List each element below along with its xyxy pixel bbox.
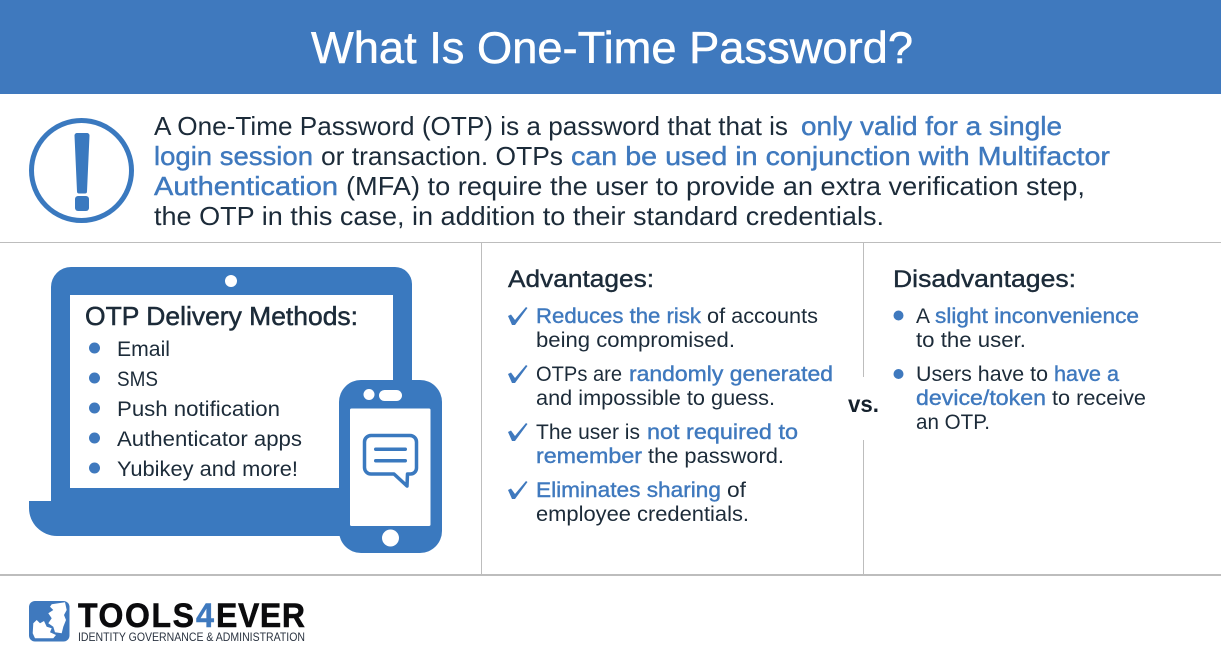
intro paragraph xyxy=(154,111,1110,231)
advantage 2 xyxy=(508,362,833,410)
disadvantage 2: device/token xyxy=(916,386,1046,410)
advantage 3 xyxy=(508,420,798,468)
title banner xyxy=(0,0,1221,94)
intro paragraph: or transaction. OTPs xyxy=(321,141,563,171)
delivery methods list: Email xyxy=(117,337,170,361)
delivery methods list: Yubikey and more! xyxy=(117,457,298,481)
advantage 4 xyxy=(508,478,749,526)
logo wordmark xyxy=(78,597,305,635)
heading: disadvantages: Disadvantages: xyxy=(893,266,1076,293)
intro paragraph: (MFA) to require the user to provide an extra verification step, xyxy=(346,171,1085,201)
icon: exclamation mark xyxy=(32,120,132,220)
advantage 2: OTPs are xyxy=(536,362,622,386)
logo wordmark: EVER xyxy=(216,597,305,635)
advantage 3: the password. xyxy=(648,444,784,468)
advantage 3: The user is xyxy=(536,420,640,444)
logo mark xyxy=(29,601,70,642)
vs label: vs. xyxy=(848,391,879,417)
advantage 4: of xyxy=(727,478,746,502)
delivery methods list xyxy=(89,337,302,481)
disadvantage 2: to receive xyxy=(1052,386,1146,410)
intro paragraph: the OTP in this case, in addition to their standard credentials. xyxy=(154,201,884,231)
logo: Tools4ever xyxy=(29,597,305,644)
disadvantage 1: slight inconvenience xyxy=(935,304,1139,328)
advantage 3: not required to xyxy=(647,420,798,444)
icon: laptop xyxy=(29,267,412,536)
delivery methods list: SMS xyxy=(117,367,158,391)
disadvantage 1 xyxy=(894,304,1139,352)
advantage 1: being compromised. xyxy=(536,328,735,352)
disadvantage 1: to the user. xyxy=(916,328,1026,352)
advantage 4: Eliminates sharing xyxy=(536,478,721,502)
icon: smartphone with message xyxy=(339,380,442,553)
delivery methods list: Push notification xyxy=(117,397,280,421)
disadvantage 2: an OTP. xyxy=(916,410,990,434)
intro paragraph: can be used in conjunction with Multifactor xyxy=(571,141,1110,171)
advantage 1: of accounts xyxy=(707,304,818,328)
heading: delivery methods: OTP Delivery Methods: xyxy=(85,301,358,331)
disadvantage 2 xyxy=(894,362,1146,434)
advantage 2: and impossible to guess. xyxy=(536,386,775,410)
disadvantage 1: A xyxy=(916,304,931,328)
advantage 1 xyxy=(508,304,818,352)
logo wordmark: 4 xyxy=(196,597,214,635)
intro paragraph: Authentication xyxy=(154,171,338,201)
panel: disadvantages xyxy=(893,266,1146,434)
disadvantage 2: have a xyxy=(1054,362,1119,386)
logo tagline: IDENTITY GOVERNANCE & ADMINISTRATION xyxy=(78,630,305,644)
advantage 1: Reduces the risk xyxy=(536,304,701,328)
delivery methods list: Authenticator apps xyxy=(117,427,302,451)
intro paragraph: login session xyxy=(154,141,313,171)
panel: advantages xyxy=(508,266,833,526)
advantage 4: employee credentials. xyxy=(536,502,749,526)
section dividers xyxy=(0,242,1221,576)
advantage 3: remember xyxy=(536,444,642,468)
logo wordmark: TOOLS xyxy=(78,597,194,635)
advantage 2: randomly generated xyxy=(629,362,833,386)
panel: OTP delivery methods xyxy=(85,301,358,481)
title: What Is One-Time Password? xyxy=(311,24,913,73)
heading: advantages: Advantages: xyxy=(508,266,654,293)
intro paragraph: only valid for a single xyxy=(801,111,1062,141)
intro paragraph: A One-Time Password (OTP) is a password that that is xyxy=(154,111,788,141)
disadvantage 2: Users have to xyxy=(916,362,1048,386)
